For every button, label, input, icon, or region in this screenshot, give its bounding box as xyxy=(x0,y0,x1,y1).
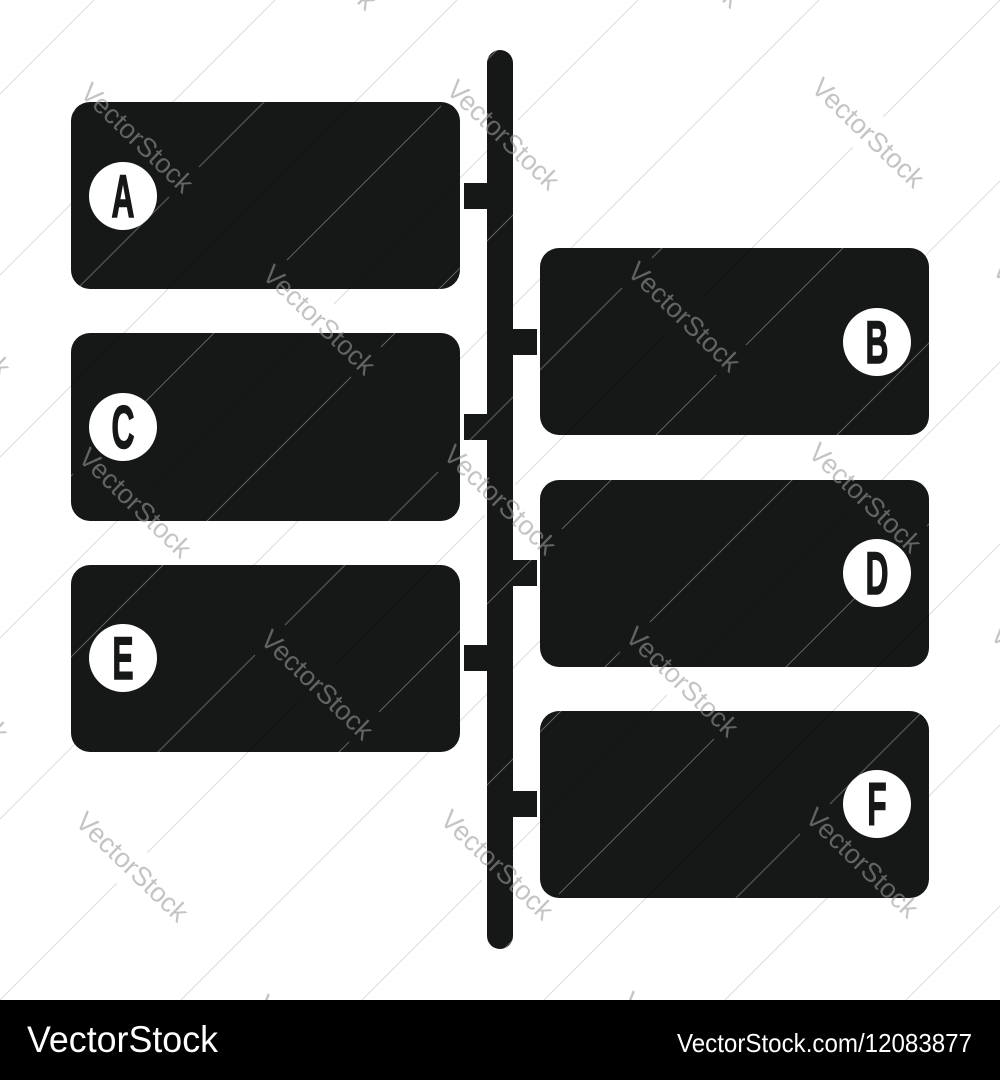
badge C xyxy=(89,393,157,462)
badge A xyxy=(89,162,157,231)
footer image URL: VectorStock.com/12083877 xyxy=(677,1028,972,1058)
repeating VectorStock watermarks: VectorStock xyxy=(73,442,198,564)
repeating VectorStock watermarks: VectorStock xyxy=(620,621,745,743)
badge A: A xyxy=(112,165,134,231)
badge D xyxy=(843,539,911,608)
repeating VectorStock watermarks: VectorStock xyxy=(75,77,200,199)
panel E xyxy=(71,565,460,752)
repeating VectorStock watermarks: VectorStock xyxy=(435,804,560,926)
footer bar xyxy=(0,1000,1000,1080)
badge E: E xyxy=(112,627,134,693)
badge F xyxy=(843,770,911,839)
timeline: vertical bar with connectors xyxy=(464,50,537,949)
panel B xyxy=(540,248,929,435)
panel D xyxy=(540,480,929,667)
repeating VectorStock watermarks: VectorStock xyxy=(438,439,563,561)
panel C xyxy=(71,333,460,521)
repeating VectorStock watermarks: VectorStock xyxy=(70,806,195,928)
repeating VectorStock watermarks: VectorStock xyxy=(255,624,380,746)
panel F xyxy=(540,711,929,898)
repeating VectorStock watermarks: VectorStock xyxy=(806,72,931,194)
badge C: C xyxy=(112,396,134,462)
repeating VectorStock watermarks: VectorStock xyxy=(441,74,566,196)
badge E xyxy=(89,624,157,693)
badge B xyxy=(843,308,911,377)
panel A xyxy=(71,102,460,289)
footer logo text: VectorStock xyxy=(27,1019,218,1060)
repeating VectorStock watermarks: VectorStock xyxy=(622,256,747,378)
badge F: F xyxy=(867,773,887,839)
repeating VectorStock watermarks: VectorStock xyxy=(800,802,925,924)
badge B: B xyxy=(866,311,888,377)
repeating VectorStock watermarks: VectorStock xyxy=(257,259,382,381)
repeating VectorStock watermarks: VectorStock xyxy=(803,437,928,559)
badge D: D xyxy=(866,542,888,608)
